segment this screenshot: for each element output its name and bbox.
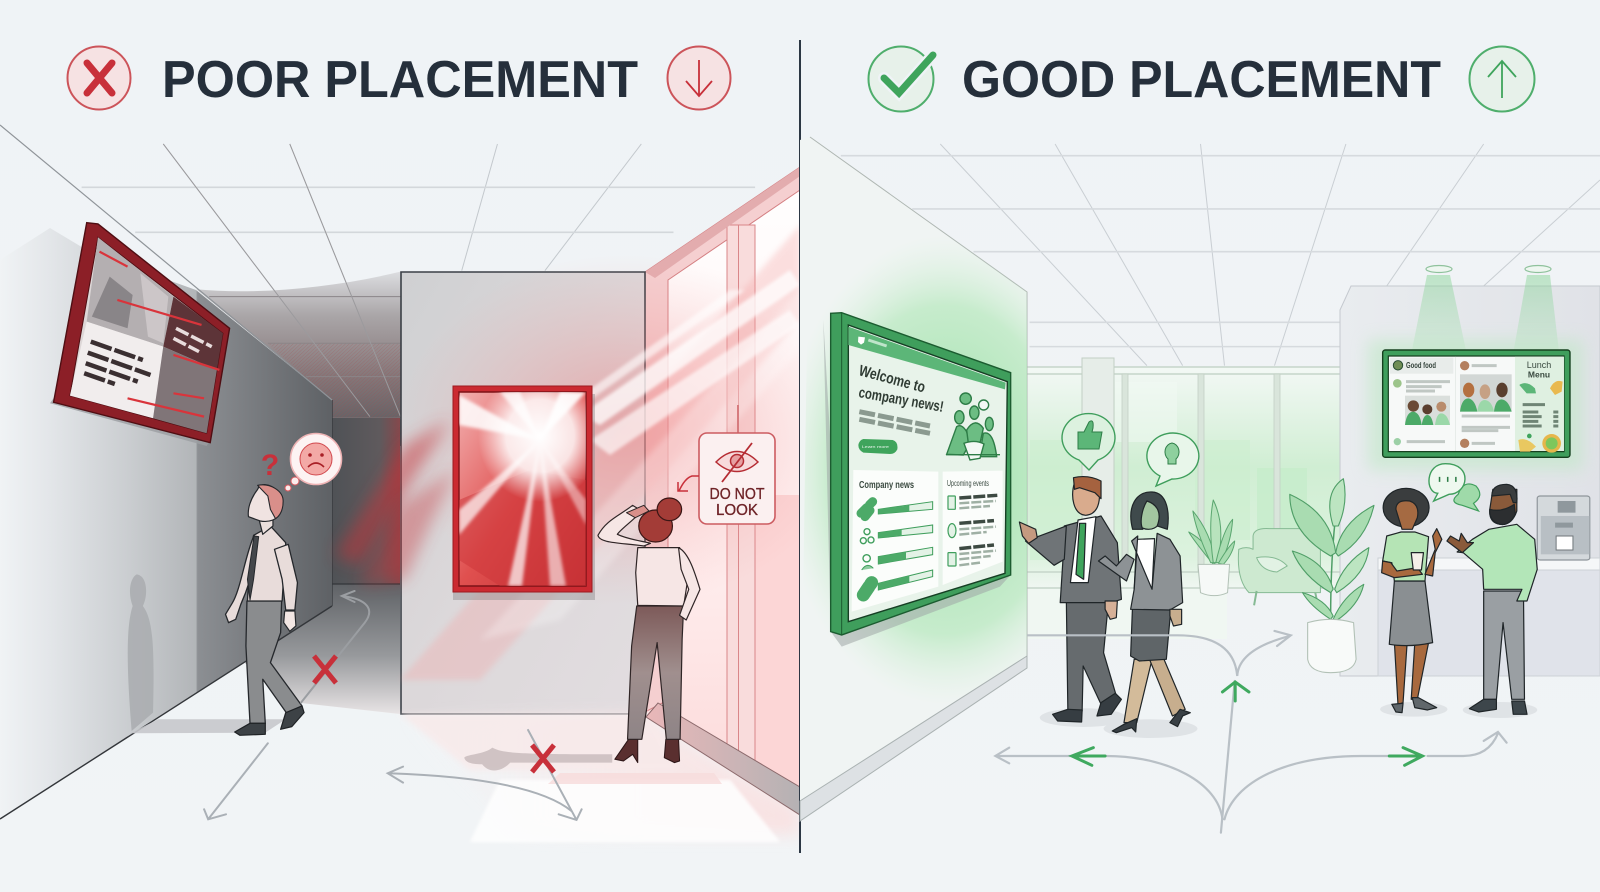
tall potted plant <box>1290 479 1374 673</box>
lunch menu text: Lunch <box>1527 360 1551 370</box>
icon: thumb <box>1078 421 1102 449</box>
light rays from the window <box>335 225 800 680</box>
right screen: social feed and lunch menu <box>1368 340 1583 470</box>
food icons <box>1518 381 1563 453</box>
lounge plants and sofa <box>1189 479 1374 673</box>
header: good placement <box>868 46 1534 112</box>
icon: red cross badge <box>68 46 130 110</box>
blocked sightline arrows <box>204 591 582 820</box>
screen heading text: Learn more <box>862 444 890 449</box>
bearded man gesturing <box>1447 484 1537 714</box>
businessman pointing at the screen <box>1019 477 1121 722</box>
woman with curly hair holding coffee <box>1382 488 1442 713</box>
logo <box>858 337 865 345</box>
thought bubble <box>285 434 342 491</box>
team and handshake illustration <box>946 393 1000 460</box>
floor lighting and baseboard <box>400 703 800 842</box>
do not look sign: LOOK <box>716 502 759 519</box>
guided sightline arrows <box>995 631 1507 833</box>
screen: angled and out of sight <box>50 223 230 446</box>
lunch menu text: Menu <box>1528 370 1550 380</box>
icon: down arrow <box>668 46 730 110</box>
divider <box>799 40 801 853</box>
right wall with counter <box>1340 266 1600 676</box>
icon: crossed-out eye <box>716 443 758 482</box>
small plant <box>1189 500 1235 596</box>
screen heading text: Welcome to <box>857 362 927 396</box>
light cone <box>1512 275 1560 360</box>
heading: POOR PLACEMENT <box>162 51 638 109</box>
panel: good placement <box>780 137 1600 833</box>
speech bubble: lightbulb idea <box>1147 433 1199 486</box>
left wall <box>0 125 332 819</box>
photo people <box>1405 383 1512 425</box>
arrow from sign <box>678 476 699 491</box>
floor shadows under people <box>1040 702 1537 738</box>
central wall <box>400 271 799 715</box>
question mark: ? <box>261 449 279 482</box>
panel: poor placement <box>0 125 855 842</box>
light cone <box>1410 275 1468 360</box>
screen heading text <box>857 362 989 491</box>
windows and skyline <box>1027 358 1340 639</box>
button <box>858 439 897 454</box>
screen heading text: Upcoming events <box>947 479 989 488</box>
ceiling grid: poor side <box>82 144 755 290</box>
green direction arrows <box>1072 682 1422 765</box>
left wall with green glow <box>800 136 1028 822</box>
sign text: DO NOT <box>710 486 765 503</box>
screen heading text: Company news <box>859 479 914 491</box>
icon: bulb <box>1165 443 1179 464</box>
heading: GOOD PLACEMENT <box>962 51 1441 109</box>
panel: upcoming events list <box>943 471 1003 585</box>
icon: check badge <box>868 46 934 112</box>
man looking up, confused <box>128 434 342 735</box>
main screen: welcome to company news <box>823 313 1011 647</box>
do not look sign <box>678 405 775 524</box>
woman shielding eyes <box>464 498 700 770</box>
blocked sign: red cross near woman <box>532 745 554 772</box>
header: poor placement <box>68 46 730 110</box>
businesswoman walking <box>1098 492 1190 733</box>
panel: company news list <box>852 470 938 612</box>
screen heading text: company news! <box>857 384 945 416</box>
coffee machine <box>1537 496 1590 560</box>
screen text: Good food <box>1406 361 1436 370</box>
ceiling light <box>1426 266 1452 272</box>
wall shadow of man <box>128 574 154 731</box>
blocked sign: red cross in corridor <box>314 656 336 683</box>
counter <box>1378 558 1600 676</box>
ceiling grid: good side <box>841 144 1600 366</box>
floor shadow <box>130 719 286 733</box>
speech bubble: thumbs up <box>1062 414 1115 470</box>
screen: washed out by sun glare <box>452 386 595 600</box>
window wall with glare <box>645 167 800 809</box>
conversation bubbles <box>1429 464 1480 511</box>
lunch menu text <box>1527 360 1551 380</box>
sofa <box>1238 529 1320 605</box>
icon: up arrow <box>1470 46 1534 112</box>
ceiling light <box>1525 266 1551 272</box>
corridor in deep shadow <box>163 144 401 714</box>
